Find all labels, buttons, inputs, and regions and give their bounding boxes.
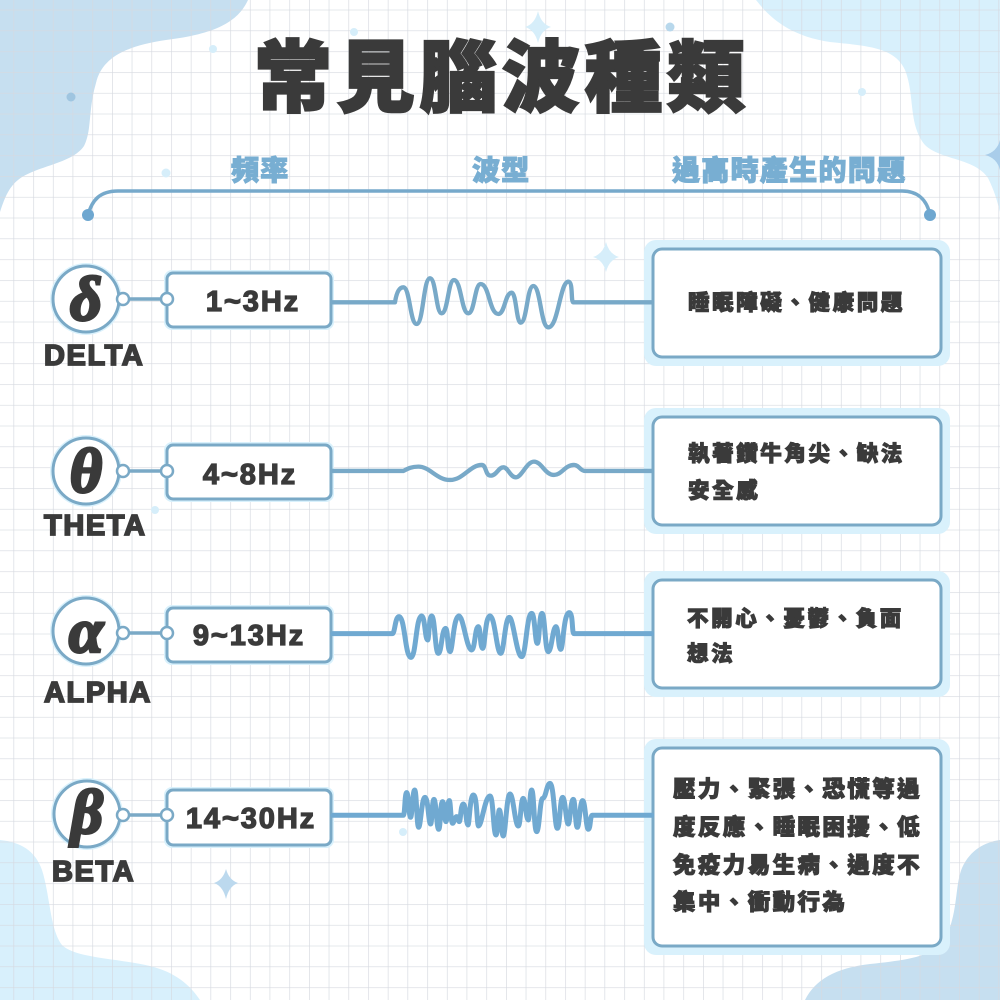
background blob: bottom right [805,840,1000,1000]
frequency box [117,442,334,502]
icon: beta symbol: β [69,779,103,847]
frequency box: 1~3Hz [206,286,300,318]
frequency box: 14~30Hz [186,803,316,835]
problem box: delta [644,240,950,366]
problem box: theta: 安全感 [688,478,760,503]
icon: delta symbol [50,263,122,335]
heading: problems when too high: 過高時產生的問題 [672,154,906,186]
heading: waveform: 波型 [472,155,531,186]
row: theta [44,408,950,542]
heading: frequency: 頻率 [231,155,290,186]
icon: alpha symbol: α [69,598,105,666]
waveform: theta [333,462,652,480]
label: THETA: THETA [44,510,147,542]
bracket connector [82,191,936,221]
problem box: beta [644,739,950,955]
problem box: theta: 執著鑽牛角尖、缺法 [688,441,905,466]
label: BETA: BETA [52,856,135,888]
connector lines [123,297,167,301]
problem box: alpha: 不開心、憂鬱、負面 [687,606,904,631]
frequency box: 9~13Hz [193,620,305,652]
problem box: beta: 度反應、睡眠困擾、低 [673,814,922,840]
waveform: beta [333,783,652,836]
problem box: alpha: 想法 [687,642,735,666]
waveform: delta [333,278,652,327]
frequency box: 4~8Hz [203,459,297,491]
frequency box [117,270,334,330]
connector lines [123,469,167,473]
icon: alpha symbol [50,595,122,667]
icon: delta symbol: δ [70,266,102,334]
problem box: theta [644,408,950,534]
column headings [231,154,906,186]
background blob: top left [0,0,248,212]
problem box: beta: 壓力、緊張、恐慌等過 [673,776,922,802]
row: delta [44,240,950,372]
problem box: beta: 集中、衝動行為 [673,889,847,915]
label: ALPHA: ALPHA [44,677,152,709]
waveform: alpha [333,613,652,657]
label: DELTA: DELTA [44,340,144,372]
title: 常見腦波種類 [254,34,750,122]
icon: theta symbol: θ [70,438,102,506]
problem box: delta: 睡眠障礙、健康問題 [688,290,905,315]
connector lines [123,631,167,635]
row: beta [51,739,950,955]
row: alpha [44,571,950,709]
icon: theta symbol [50,435,122,507]
background blob: top right [756,0,1000,212]
frequency box [117,787,334,848]
connector lines [123,813,167,817]
problem box: alpha [644,571,950,697]
background blob: bottom left [0,840,200,1000]
problem box: beta: 免疫力易生病、過度不 [673,852,922,878]
icon: beta symbol [51,778,123,850]
frequency box [117,605,334,665]
